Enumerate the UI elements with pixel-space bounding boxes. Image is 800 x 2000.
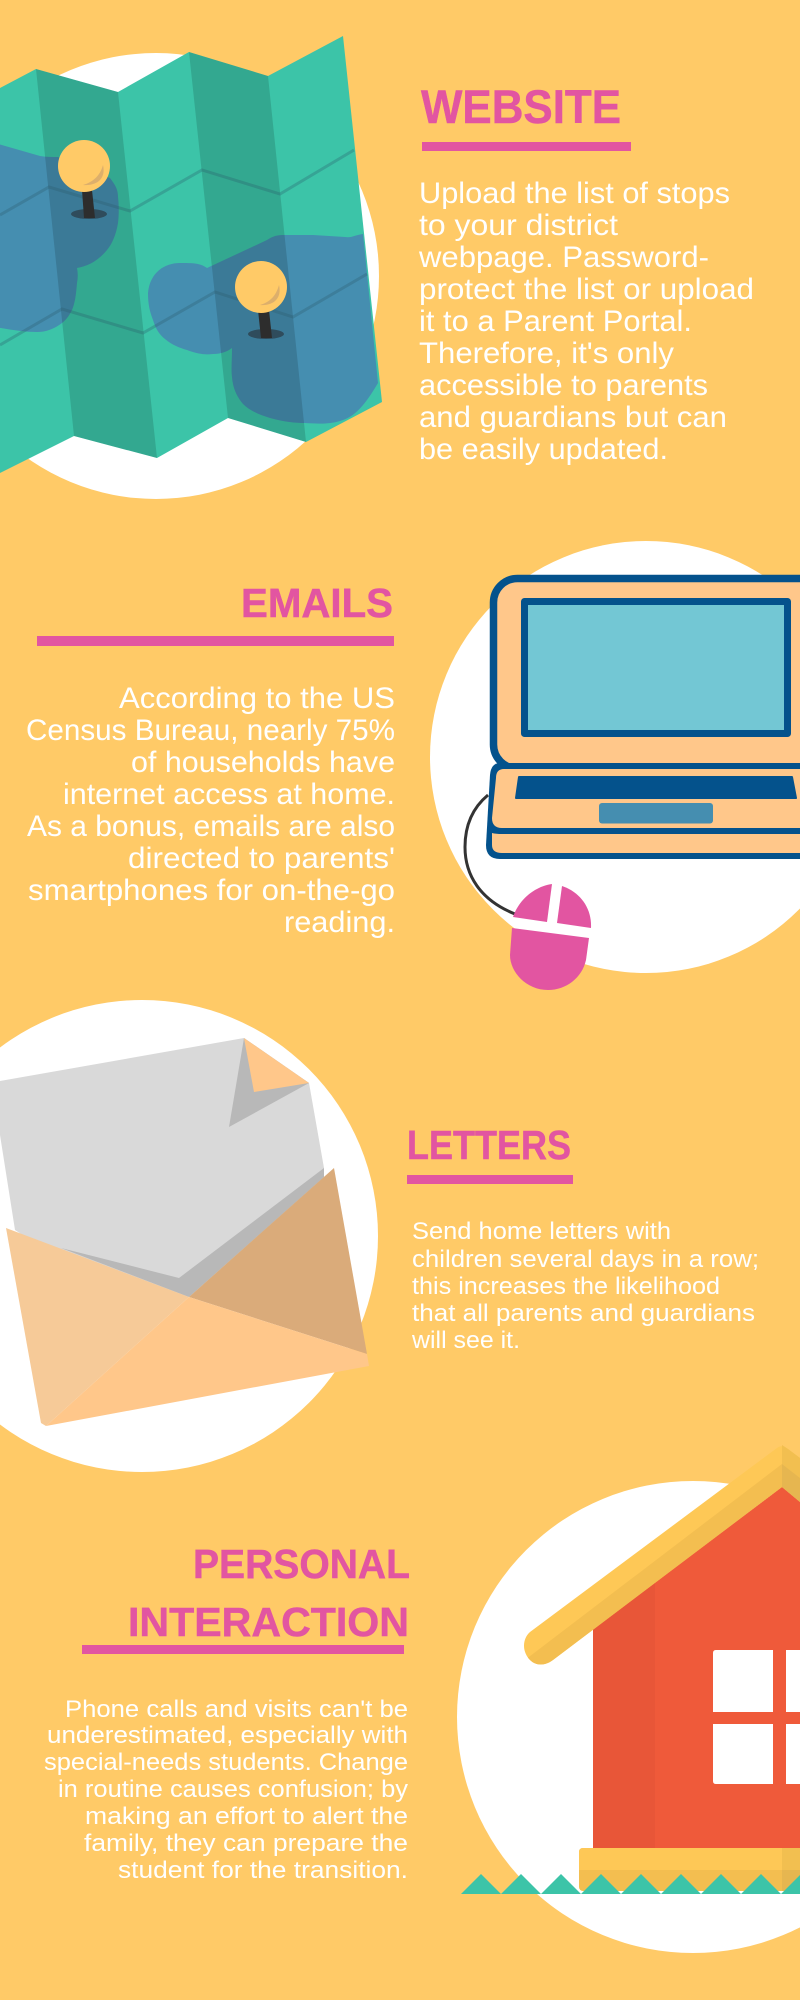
heading: personal interaction: PERSONAL <box>193 1541 410 1587</box>
icon: computer mouse <box>510 884 591 990</box>
text block: emails description <box>26 682 395 939</box>
icon: white circle behind laptop <box>430 541 800 973</box>
text block: personal interaction description: special-needs students. Change <box>44 1749 408 1776</box>
icon: laptop <box>486 578 800 859</box>
icon: envelope <box>6 1168 369 1426</box>
heading: personal interaction <box>128 1541 410 1645</box>
text block: letters description <box>411 1218 759 1354</box>
text block: letters description: will see it. <box>411 1327 520 1354</box>
text block: personal interaction description: family, they can prepare the <box>84 1830 408 1857</box>
text block: emails description: of households have <box>131 746 395 779</box>
text block: emails description: directed to parents' <box>128 842 395 875</box>
text block: emails description: Census Bureau, nearly 75% <box>26 714 395 747</box>
text block: letters description: children several days in a row; <box>412 1246 759 1273</box>
text block: emails description: smartphones for on-the-go <box>28 874 395 907</box>
icon: folded map <box>0 36 382 473</box>
text block: emails description: As a bonus, emails are also <box>27 810 395 843</box>
text block: website description: Upload the list of stops <box>419 177 730 210</box>
text block: personal interaction description <box>44 1696 409 1884</box>
icon: white circle behind map <box>0 53 379 499</box>
text block: letters description: Send home letters with <box>412 1218 671 1245</box>
heading: emails: EMAILS <box>241 580 393 626</box>
icon: mouse cable <box>465 795 515 914</box>
text block: website description: accessible to parents <box>419 369 708 402</box>
text block: website description: protect the list or upload <box>419 273 754 306</box>
heading underline <box>82 1645 404 1654</box>
text block: letters description: this increases the likelihood <box>412 1273 720 1300</box>
icon: sheet of paper <box>0 1038 324 1297</box>
text block: emails description: reading. <box>284 906 395 939</box>
icon: white circle behind house <box>457 1481 800 1953</box>
panel: emails <box>26 541 800 990</box>
text block: personal interaction description: underestimated, especially with <box>47 1722 408 1749</box>
heading: letters: LETTERS <box>407 1122 571 1168</box>
text block: website description: webpage. Password- <box>418 241 709 274</box>
text block: website description: be easily updated. <box>419 433 668 466</box>
text block: website description: to your district <box>419 209 619 242</box>
text block: personal interaction description: student for the transition. <box>118 1857 408 1884</box>
heading: website: WEBSITE <box>421 80 621 133</box>
text block: personal interaction description: in routine causes confusion; by <box>58 1776 409 1803</box>
text block: personal interaction description: Phone calls and visits can't be <box>65 1696 408 1723</box>
text block: emails description: internet access at home. <box>63 778 395 811</box>
icon: map pin one <box>58 140 110 219</box>
icon: grass triangles <box>461 1874 800 1894</box>
text block: website description: and guardians but can <box>419 401 727 434</box>
heading underline <box>422 142 631 151</box>
text block: website description: it to a Parent Portal. <box>419 305 692 338</box>
icon: window <box>713 1650 800 1784</box>
panel: personal interaction <box>44 1445 800 1953</box>
icon: house <box>524 1445 800 1891</box>
panel: website <box>0 36 754 499</box>
icon: white circle behind envelope <box>0 1000 378 1472</box>
icon: roof <box>524 1445 800 1664</box>
heading underline <box>37 636 394 646</box>
panel: letters <box>0 1000 759 1472</box>
icon: foundation <box>579 1848 800 1891</box>
text block: emails description: According to the US <box>119 682 395 715</box>
text block: letters description: that all parents and guardians <box>412 1300 755 1327</box>
heading underline <box>407 1175 573 1184</box>
text block: website description <box>418 177 754 466</box>
text block: personal interaction description: making an effort to alert the <box>85 1803 408 1830</box>
text block: website description: Therefore, it's only <box>419 337 674 370</box>
icon: map pin two <box>235 261 287 339</box>
heading: personal interaction: INTERACTION <box>128 1599 409 1645</box>
